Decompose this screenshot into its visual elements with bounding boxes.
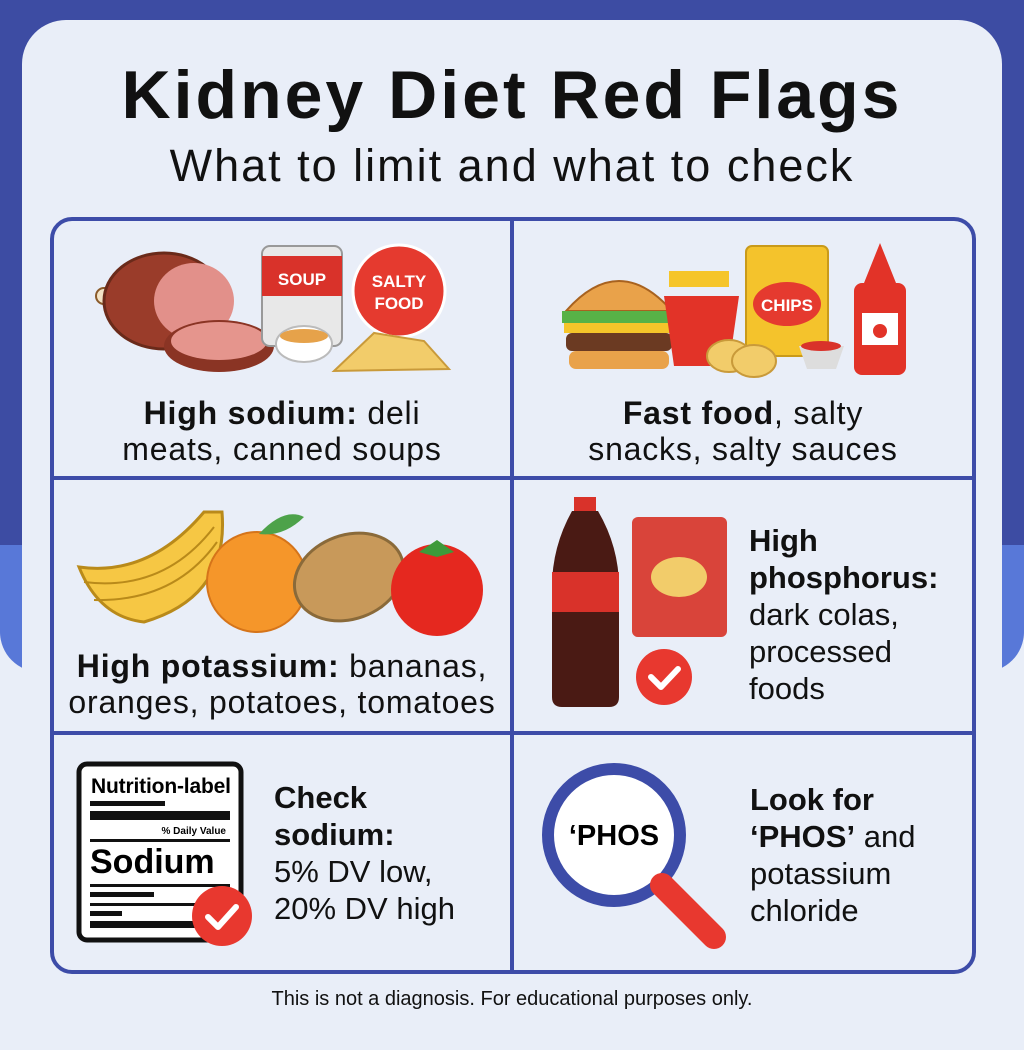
text: oranges, potatoes, tomatoes: [68, 684, 496, 720]
title: Kidney Diet Red Flags: [122, 57, 902, 133]
panel: high potassium: [68, 510, 496, 720]
text: sodium:: [274, 817, 395, 852]
text: High: [749, 523, 818, 558]
text: Check: [274, 780, 367, 815]
text: [68, 648, 496, 720]
panel: fast food: [562, 243, 906, 467]
text: meats, canned soups: [122, 431, 442, 467]
text: potassium: [750, 856, 891, 891]
icon: magnifier: [542, 763, 726, 949]
text: snacks, salty sauces: [588, 431, 898, 467]
text: Look for: [750, 782, 874, 817]
text: [750, 782, 915, 928]
text: High sodium: deli: [144, 395, 420, 431]
panel: look for PHOS: [542, 763, 915, 949]
text: ‘PHOS’ and: [750, 819, 915, 854]
text: foods: [749, 671, 825, 706]
subtitle: What to limit and what to check: [170, 140, 854, 191]
text: [588, 395, 898, 467]
text: phosphorus:: [749, 560, 938, 595]
icon: nutrition label: [76, 762, 252, 946]
text: High potassium: bananas,: [77, 648, 487, 684]
footnote: This is not a diagnosis. For educational purposes only.: [271, 988, 752, 1010]
panel: check sodium: [76, 762, 455, 946]
text: [122, 395, 442, 467]
grid: [50, 217, 976, 974]
panel: high sodium: [95, 244, 452, 467]
text: [749, 523, 938, 706]
icon: magnifier: ‘PHOS: [569, 820, 659, 852]
text: processed: [749, 634, 892, 669]
icon: cola and chips bag with check: [552, 497, 727, 707]
icon: ham, soup, salty food: FOOD: [374, 294, 424, 313]
icon: nutrition label: % Daily Value: [162, 826, 226, 837]
text: dark colas,: [749, 597, 899, 632]
text: 20% DV high: [274, 891, 455, 926]
icon: burger, fries, chips, ketchup: CHIPS: [761, 296, 813, 315]
text: chloride: [750, 893, 859, 928]
text: [274, 780, 455, 926]
icon: nutrition label: Sodium: [90, 843, 215, 881]
panel: high phosphorus: [552, 497, 938, 707]
text: 5% DV low,: [274, 854, 433, 889]
icon: ham, soup, salty food: SALTY: [372, 272, 427, 291]
icon: ham, soup, salty food: [95, 244, 452, 372]
icon: burger, fries, chips, ketchup: [562, 243, 906, 378]
icon: ham, soup, salty food: SOUP: [278, 270, 326, 289]
icon: fruits: [76, 510, 483, 636]
text: Fast food, salty: [623, 395, 863, 431]
icon: nutrition label: Nutrition-label: [91, 775, 231, 798]
